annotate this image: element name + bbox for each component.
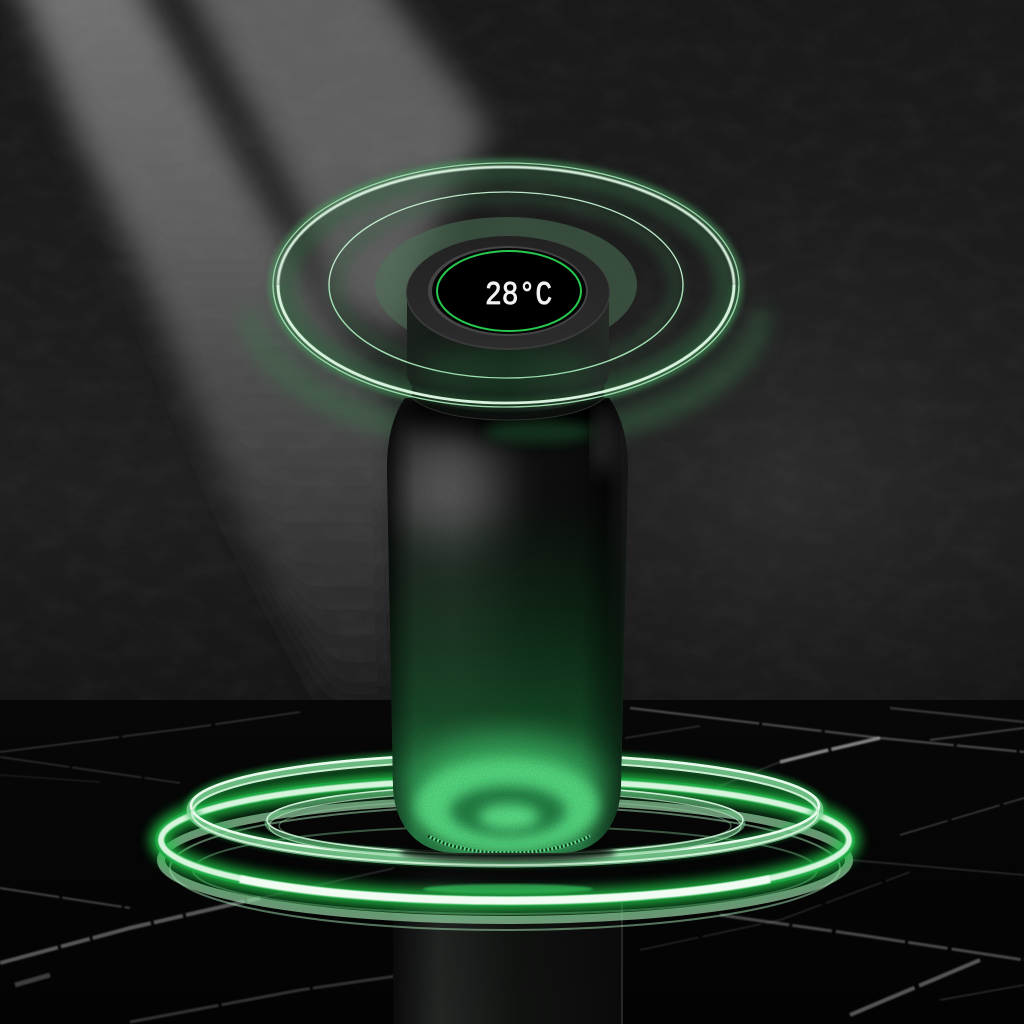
light beams on wall bbox=[8, 0, 490, 700]
lower glowing rings bbox=[160, 754, 850, 930]
upper rings: front arcs over cap bbox=[273, 285, 739, 407]
cap collar bbox=[412, 385, 604, 420]
marble floor bbox=[0, 700, 1024, 1024]
inner ring bbox=[267, 786, 743, 860]
cap top face bbox=[406, 236, 610, 350]
translucent disc bbox=[375, 217, 637, 353]
knurled base edge bbox=[428, 836, 590, 853]
display bezel bbox=[428, 246, 588, 336]
marble veins bbox=[0, 708, 1024, 1022]
temperature readout: 28°C bbox=[485, 278, 552, 315]
display with green ring bbox=[437, 251, 581, 331]
middle ring bbox=[191, 754, 819, 865]
bottle reflection on floor bbox=[393, 868, 623, 1024]
outer ring bbox=[160, 779, 850, 901]
glow bands bbox=[286, 173, 726, 397]
contact shadow bbox=[400, 842, 616, 862]
upper rings: back halves and disc bbox=[272, 162, 740, 408]
bottle bbox=[385, 236, 630, 862]
wall background bbox=[0, 0, 1024, 702]
outer ring glow bbox=[160, 779, 850, 901]
glow dark ring bbox=[450, 786, 566, 836]
bottom glow bbox=[415, 737, 599, 833]
faint lower halo rings on wall bbox=[250, 310, 762, 440]
ring reflections bbox=[161, 800, 849, 930]
bottle body bbox=[385, 378, 630, 855]
cap side bbox=[407, 292, 609, 412]
wall plaster texture bbox=[0, 0, 1024, 702]
